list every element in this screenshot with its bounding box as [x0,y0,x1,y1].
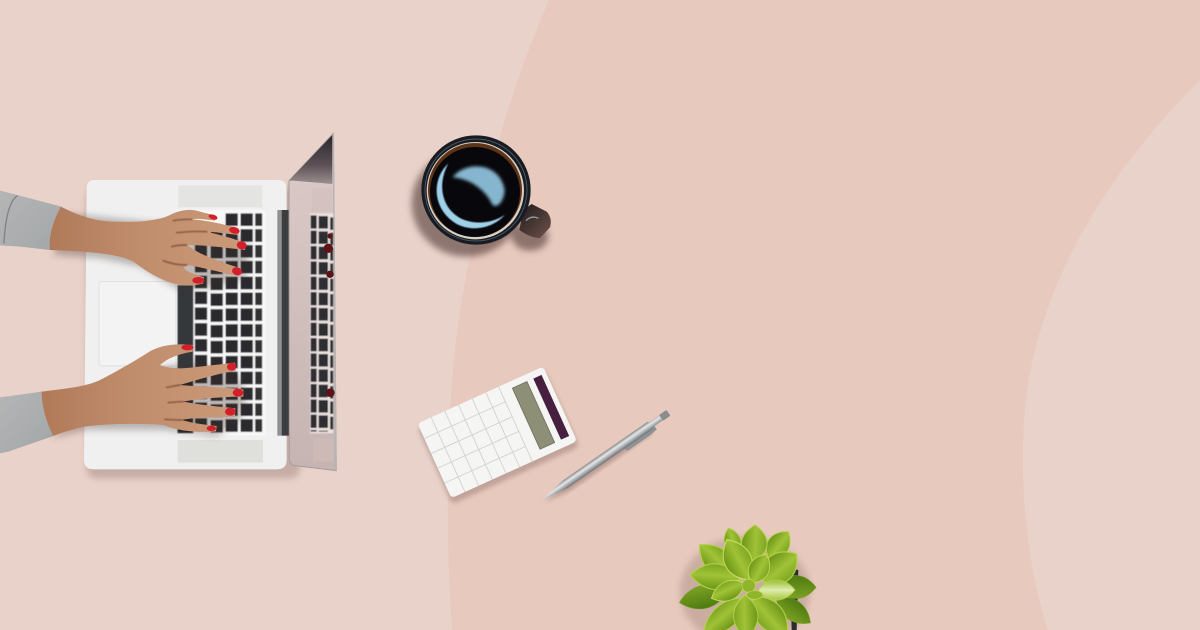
lower hand shadow [50,363,247,438]
hinge [277,210,299,436]
lower knuckle creases [165,385,183,420]
solar panel [533,375,569,440]
upper hand shape [50,207,246,285]
pen clip [623,426,657,452]
coffee mug [412,135,551,257]
keyboard [176,210,265,435]
inner lip [427,142,524,239]
laptop screen [289,133,337,471]
mug shadow [412,150,548,257]
keypad [418,387,532,498]
upper hand [50,207,250,288]
plant shadow [680,537,810,630]
background: central darker curved band [448,0,1200,630]
middle leaves [689,524,806,630]
calculator body [418,366,577,498]
pen clicker [659,410,670,421]
pen shadow [543,427,652,506]
mug body [421,135,531,245]
upper knuckle creases [163,219,207,265]
front leaves [708,533,776,607]
upper hand shadow [53,213,250,288]
pen body [538,414,664,505]
pale front leaf [758,580,795,600]
laptop with hands [0,133,337,478]
pen [538,409,673,508]
reflected nails [324,233,335,397]
calculator [416,366,580,504]
coffee [428,143,522,237]
calculator shadow [417,370,580,504]
upper sleeve [0,191,61,250]
bottom speaker patch [178,440,263,463]
lower sleeve [0,392,53,453]
mug handle [519,204,551,238]
lower hand shape [42,344,243,436]
back leaves [677,575,816,630]
plant centre [742,579,763,599]
display [512,382,555,449]
laptop base [84,180,287,469]
top speaker patch [178,185,262,207]
pot corners [790,568,798,630]
laptop shadow [87,187,300,478]
succulent plant [677,524,816,630]
lower hand [42,344,247,438]
upper nails [192,213,248,284]
rim ring [425,139,527,241]
lower nails [181,344,243,431]
trackpad [99,282,176,366]
